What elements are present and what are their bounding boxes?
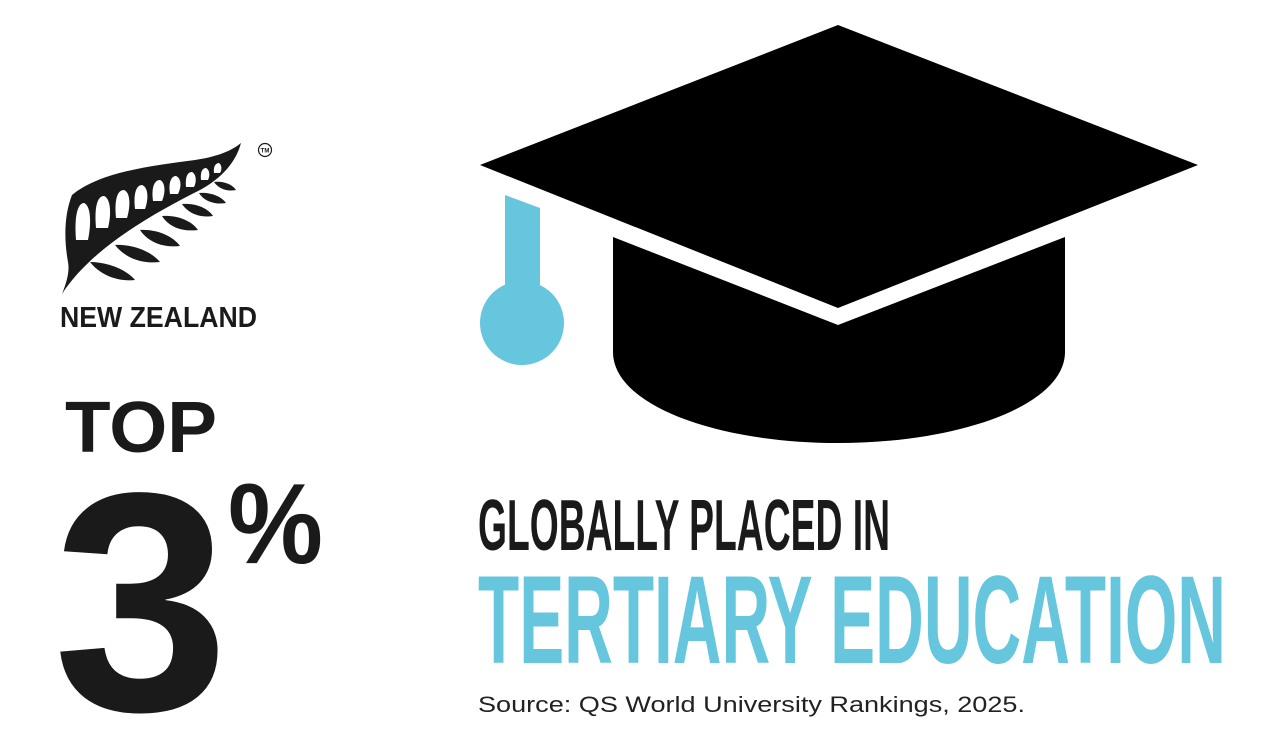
text: GLOBALLY PLACED IN: GLOBALLY PLACED IN: [478, 486, 890, 566]
cap base: [613, 237, 1065, 443]
stat: TOP 3%: [53, 388, 323, 746]
icon: fern: [62, 143, 241, 294]
icon: trademark: TM: [261, 148, 269, 154]
icon: trademark: [258, 144, 272, 156]
icon: graduation cap: [480, 25, 1198, 443]
text: TOP: TOP: [65, 388, 217, 468]
headline: [478, 486, 1226, 690]
text: percent: %: [228, 461, 323, 588]
tassel: [480, 195, 564, 365]
logo text: NEW ZEALAND: [60, 302, 257, 334]
mortarboard: [480, 25, 1198, 308]
source note: Source: QS World University Rankings, 2025.: [478, 692, 1025, 717]
logo: New Zealand fern: [60, 143, 272, 334]
